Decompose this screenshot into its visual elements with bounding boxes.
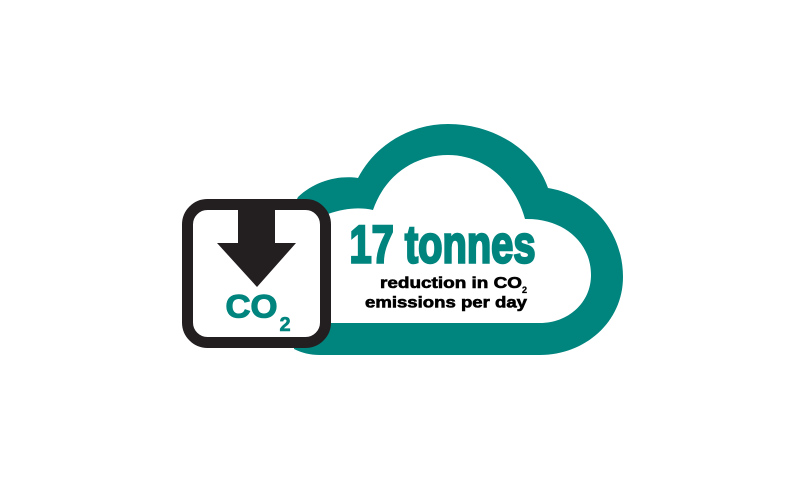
text: reduction in CO2: 2 [522, 285, 527, 295]
text: reduction in CO2: reduction in CO [380, 275, 522, 292]
CO2 label: 2 [280, 314, 291, 336]
text: reduction in CO2 [380, 275, 527, 295]
icon: CO2 reduction box [188, 204, 326, 342]
CO2 label [226, 288, 291, 336]
heading: 17 tonnes: 17 tonnes [350, 216, 536, 274]
CO2 label: CO [226, 288, 278, 324]
icon: down arrow [217, 208, 296, 287]
icon: cloud outline [294, 124, 623, 355]
box frame [188, 204, 326, 342]
text: emissions per day: emissions per day [365, 294, 527, 312]
